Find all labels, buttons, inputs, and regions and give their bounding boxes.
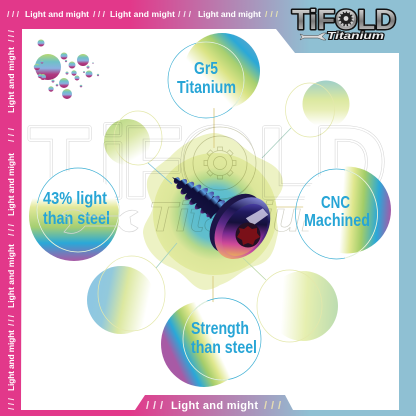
bubble: 43% light than steel: 43% light [43, 188, 107, 208]
connector lines [118, 104, 308, 305]
left banner text: /// [6, 223, 16, 236]
top banner text: Light and might [25, 9, 89, 19]
left banner text: Light and might [6, 153, 16, 216]
left banner text: Light and might [6, 330, 16, 391]
watermark: TiFOLD Titanium: TiFOLD [29, 107, 386, 219]
bubble: Gr5 Titanium [168, 33, 260, 118]
left banner text: /// [6, 29, 16, 42]
bubble: 43% light than steel: than steel [43, 208, 110, 228]
top banner text: /// [178, 9, 192, 19]
icon: logo gear [339, 12, 353, 26]
bubble: Strength than steel [161, 298, 261, 387]
bubble: Strength than steel: Strength [191, 318, 249, 338]
watermark: TiFOLD Titanium: TiFOLD [29, 107, 386, 219]
left banner text: /// [6, 314, 16, 326]
left banner text: Light and might [6, 47, 16, 113]
bottom banner text: /// [264, 400, 281, 412]
icon: torx recess [236, 222, 260, 248]
bubble: 43% light than steel [29, 168, 119, 261]
top banner text: Light and might [198, 9, 261, 19]
bubble: CNC Machined: CNC [321, 192, 350, 212]
bubble: CNC Machined [296, 166, 391, 259]
watermark: wrench [62, 210, 138, 233]
top banner text: Light and might [110, 9, 175, 19]
icon: wrench [300, 33, 326, 40]
logo: TiFOLD Titanium: TiFOLD [292, 4, 396, 35]
bubble: Gr5 Titanium: Gr5 [194, 58, 218, 78]
central blob [143, 133, 283, 290]
bottom banner text: Light and might [171, 400, 258, 412]
icon: watermark gear [184, 127, 256, 199]
bubble cluster [34, 40, 99, 99]
bottom banner text [146, 400, 281, 412]
bubble: lower left decorative [87, 256, 165, 334]
top banner text: /// [265, 9, 279, 19]
bubble: lower right decorative [257, 270, 338, 342]
left banner text: /// [6, 127, 16, 142]
bubble: Gr5 Titanium: Titanium [177, 77, 236, 97]
bottom banner text: /// [146, 400, 163, 412]
left banner text: Light and might [6, 244, 16, 308]
icon: titanium screw [152, 149, 282, 270]
bubble: upper right decorative [286, 80, 350, 137]
left banner text [6, 29, 16, 410]
left banner text: /// [6, 397, 16, 410]
bubble: upper left decorative [104, 111, 162, 165]
top banner text: /// [93, 9, 106, 19]
watermark: TiFOLD Titanium: TiFOLD [29, 107, 386, 219]
bubble: Strength than steel: than steel [191, 337, 257, 357]
top banner text [7, 9, 279, 19]
bubble: CNC Machined: Machined [304, 210, 370, 230]
watermark: TiFOLD Titanium: Titanium [148, 193, 343, 240]
top banner text: /// [7, 9, 20, 19]
logo: TiFOLD Titanium: Titanium [327, 31, 384, 42]
